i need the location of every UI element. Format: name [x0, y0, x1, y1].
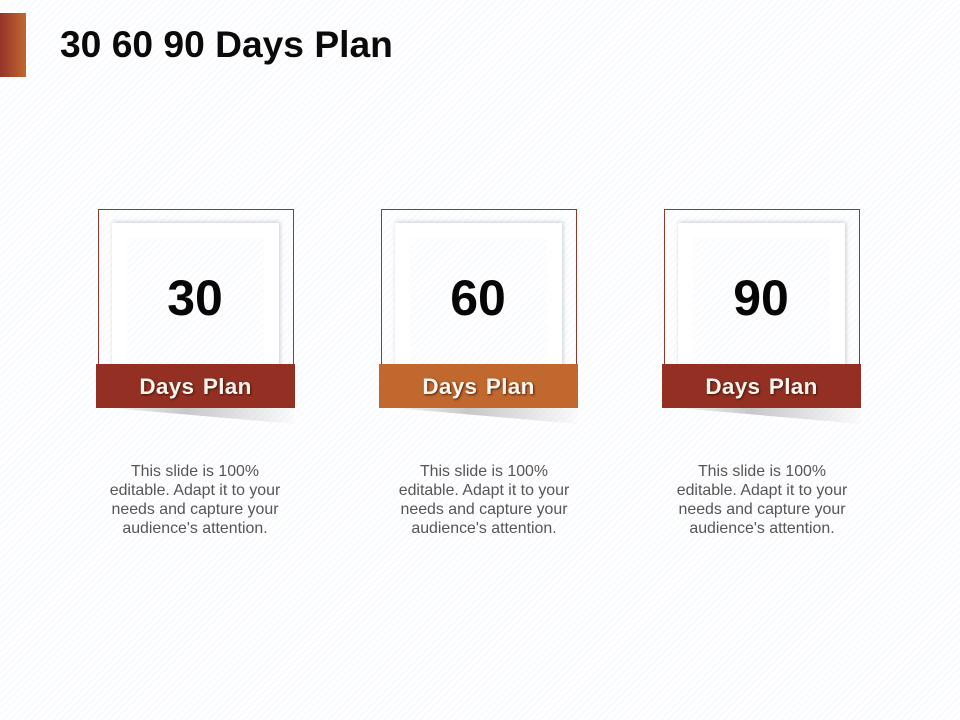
- label band: [379, 364, 578, 408]
- ribbon shadow: [682, 408, 850, 422]
- number 90: 90: [733, 270, 789, 326]
- card frame: [98, 209, 294, 370]
- text block: 90 days: audience's attention.: [689, 520, 835, 537]
- number 60: 60: [450, 270, 506, 326]
- inner square: [411, 239, 546, 369]
- card frame: [381, 209, 577, 370]
- label band: Days Plan: [705, 374, 818, 399]
- ribbon shadow: [399, 408, 568, 422]
- panel: 30 days card: [96, 209, 295, 422]
- text block: 30 days: [110, 463, 280, 537]
- label band: Days Plan: [139, 374, 252, 399]
- number 30: 30: [167, 270, 223, 326]
- white mat: [395, 223, 562, 369]
- text block: 60 days: audience's attention.: [411, 520, 557, 537]
- label band: Days Plan: [422, 374, 535, 399]
- panel: 60 days card: [379, 209, 578, 422]
- text block: 90 days: [677, 463, 848, 537]
- white mat: [112, 223, 279, 369]
- white mat: [678, 223, 845, 369]
- text block: 60 days: editable. Adapt it to your: [399, 482, 569, 499]
- text block: 30 days: editable. Adapt it to your: [110, 482, 280, 499]
- text block: 60 days: [399, 463, 570, 537]
- text block: 90 days: This slide is 100%: [698, 463, 826, 480]
- text block: 60 days: needs and capture your: [401, 501, 567, 518]
- card frame: [664, 209, 860, 370]
- text block: 30 days: audience's attention.: [122, 520, 268, 537]
- header accent bar: [0, 13, 26, 77]
- label band: [662, 364, 861, 408]
- inner square: [694, 239, 829, 369]
- text block: 60 days: This slide is 100%: [420, 463, 548, 480]
- text block: 90 days: needs and capture your: [679, 501, 845, 518]
- text block: 90 days: editable. Adapt it to your: [677, 482, 847, 499]
- text block: 30 days: needs and capture your: [112, 501, 278, 518]
- title: 30 60 90 Days Plan: [60, 23, 393, 65]
- text block: 30 days: This slide is 100%: [131, 463, 259, 480]
- inner square: [128, 239, 263, 369]
- ribbon shadow: [116, 408, 284, 422]
- panel: 90 days card: [662, 209, 861, 422]
- label band: [96, 364, 295, 408]
